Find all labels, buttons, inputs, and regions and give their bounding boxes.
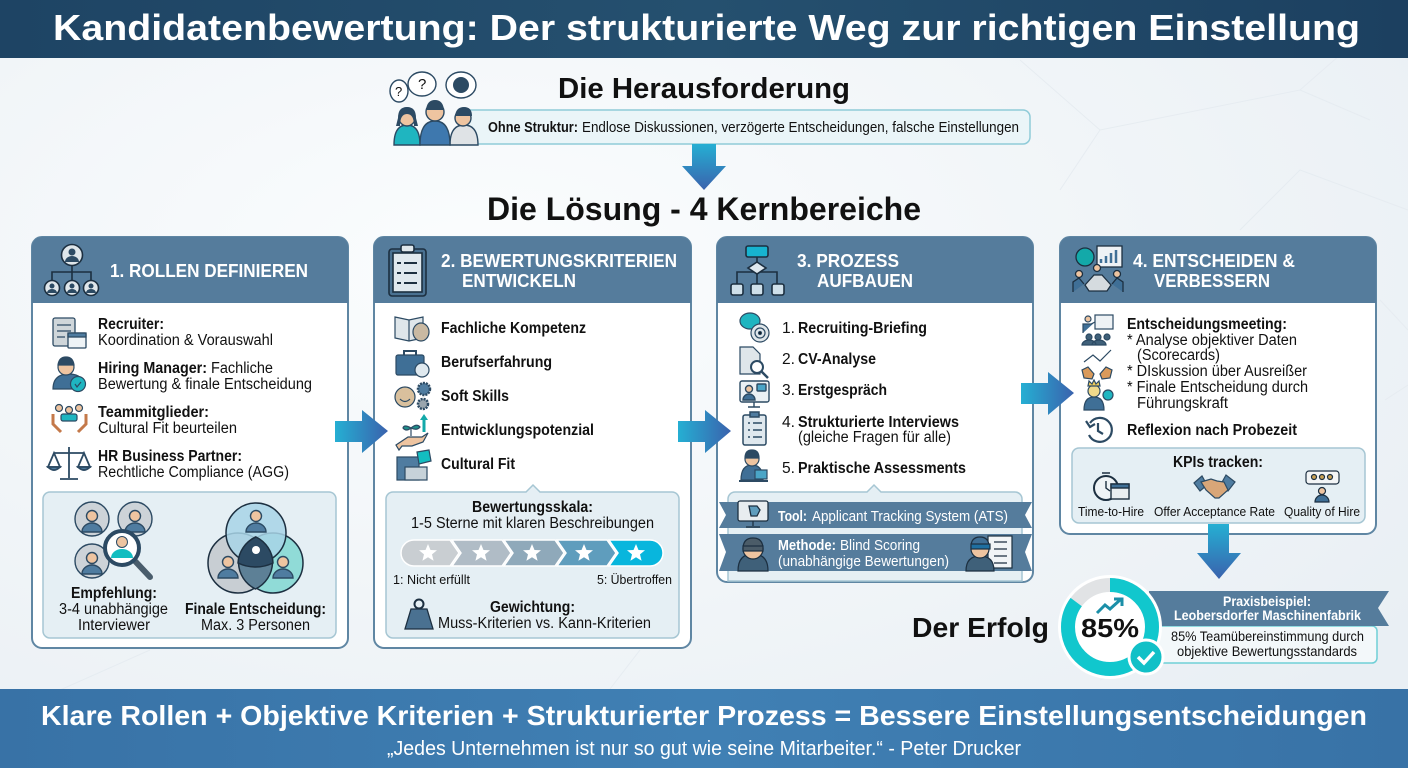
text: HR Business Partner <box>98 448 289 481</box>
footer banner <box>0 689 1408 768</box>
chart: five-star chevron scale <box>401 540 663 566</box>
ribbon: Tool <box>719 501 1032 528</box>
text: Hiring Manager <box>98 360 312 393</box>
icon: briefing target <box>740 313 769 342</box>
scale labels <box>393 572 672 587</box>
heading: Bewertungskriterien <box>441 251 677 291</box>
text: Soft Skills: Soft Skills <box>441 388 509 405</box>
text: Hiring Manager: Bewertung & finale Entscheidung <box>98 376 312 393</box>
text: Entwicklungspotenzial: Entwicklungspotenzial <box>441 422 594 439</box>
text: Empfehlung: 3-4 unabhängige <box>59 601 168 618</box>
text: Finale Entscheidung: Max. 3 Personen <box>201 617 310 634</box>
KPI labels: Offer Acceptance Rate <box>1154 504 1275 519</box>
text: step 5: Praktische Assessments <box>798 460 966 477</box>
text: step 3: Erstgespräch <box>798 382 887 399</box>
heading: Prozess: 3. PROZESS <box>797 251 899 271</box>
text: Empfehlung: Empfehlung: <box>71 585 157 602</box>
callout: Ohne Struktur: Ohne Struktur: <box>488 120 578 136</box>
ribbon: Praxisbeispiel case study: objektive Bewertungsstandards <box>1177 643 1357 659</box>
icon: flowchart <box>731 246 784 295</box>
chart: 85 percent donut <box>1058 575 1163 679</box>
text: Bewertungsskala: 1-5 Sterne mit klaren Beschreibungen <box>411 515 654 532</box>
text: KPIs tracken: KPIs tracken: <box>1173 454 1263 471</box>
text: step 1: Recruiting-Briefing <box>798 320 927 337</box>
text: decision meeting <box>1127 316 1308 412</box>
ribbon: Methode: (unabhängige Bewertungen) <box>778 553 949 570</box>
heading: Der Erfolg: Der Erfolg <box>912 612 1049 643</box>
info box: interviewer and decision <box>43 492 336 638</box>
ribbon: Praxisbeispiel case study: 85% Teamübereinstimmung durch <box>1171 628 1364 644</box>
heading: Prozess: AUFBAUEN <box>817 271 913 291</box>
ribbon: Methode: Methode: <box>778 537 836 554</box>
text: step 3: 3. <box>782 382 795 399</box>
icon: venn diagram <box>208 503 303 593</box>
text: decision meeting: * Analyse objektiver Daten <box>1127 332 1297 349</box>
info box: KPIs <box>1072 448 1365 523</box>
text: Recruiter: Koordination & Vorauswahl <box>98 332 273 349</box>
callout: Ohne Struktur: Endlose Diskussionen, verzögerte Entscheidungen, falsche Einstellungen <box>582 120 1019 136</box>
icon: smile and gears <box>395 383 430 409</box>
text: Recruiter: Recruiter: <box>98 316 164 333</box>
callout: Ohne Struktur <box>462 110 1030 144</box>
icon: leader with medal <box>1084 380 1113 410</box>
icon: blind scoring reviewer <box>966 536 1012 571</box>
icon: assessment at laptop <box>739 450 768 481</box>
heading: Die Herausforderung: Die Herausforderung <box>558 73 850 105</box>
text: Gewichtung: Gewichtung: <box>490 599 575 616</box>
ribbon: Praxisbeispiel case study: Leobersdorfer Maschinenfabrik <box>1174 607 1361 623</box>
icon: hiring manager <box>53 357 86 392</box>
text: Reflexion: Reflexion nach Probezeit <box>1127 422 1297 439</box>
icon: hands and trend line <box>1082 350 1112 379</box>
text: Teammitglieder: Cultural Fit beurteilen <box>98 420 237 437</box>
text: step 2: CV-Analyse <box>798 351 876 368</box>
text: Hiring Manager: Hiring Manager: <box>98 360 207 377</box>
icon: interview checklist <box>743 412 766 445</box>
text: Bewertungsskala: Bewertungsskala: <box>472 499 593 516</box>
heading: Bewertungskriterien: ENTWICKELN <box>462 271 576 291</box>
arrow: panel 4 to success <box>1197 524 1241 579</box>
arrow: panel 1 to 2 <box>335 410 388 453</box>
chart: 85 percent donut: 85% <box>1081 613 1139 643</box>
icon: CV analysis <box>740 347 768 378</box>
text: Empfehlung: Interviewer <box>78 617 150 634</box>
ribbon: Tool: Applicant Tracking System (ATS) <box>812 508 1008 525</box>
text: step 4: Strukturierte Interviews <box>798 414 959 431</box>
text: step 4: 4. <box>782 414 795 431</box>
icon: meeting with charts <box>1073 246 1123 292</box>
text: Finale Entscheidung: Finale Entscheidung: <box>185 601 326 618</box>
icon: scales <box>48 447 90 479</box>
text: Recruiter <box>98 316 273 349</box>
arrow: panel 3 to 4 <box>1021 372 1074 415</box>
footer banner: Klare Rollen + Objektive Kriterien + Strukturierter Prozess = Bessere Einstellungsentscheidungen <box>41 700 1367 731</box>
icon: team in hands <box>53 404 86 432</box>
KPI labels <box>1078 504 1360 519</box>
text: Teammitglieder <box>98 404 237 437</box>
box behind ribbons <box>728 485 1022 581</box>
ribbon: Methode <box>719 534 1032 571</box>
text: Empfehlung <box>59 585 168 634</box>
text: decision meeting: Führungskraft <box>1137 395 1229 412</box>
icon: org chart <box>44 244 98 296</box>
heading: Bewertungskriterien: 2. BEWERTUNGSKRITERIEN <box>441 251 677 271</box>
icon: blindfolded person <box>738 538 768 571</box>
text: Bewertungsskala <box>411 499 654 532</box>
text: step 1: 1. <box>782 320 795 337</box>
icon: confused people <box>390 72 478 145</box>
icon: stopwatch and calendar <box>1094 473 1129 500</box>
heading: Entscheiden: VERBESSERN <box>1154 271 1270 291</box>
text: HR Business Partner: Rechtliche Compliance (AGG) <box>98 464 289 481</box>
icon: clipboard calendar <box>53 318 86 348</box>
icon: confused people: ? <box>418 76 426 93</box>
icon: ATS monitor <box>738 501 768 527</box>
ribbon: Praxisbeispiel case study: Praxisbeispiel: <box>1223 593 1311 609</box>
text: HR Business Partner: HR Business Partner: <box>98 448 242 465</box>
arrow: panel 2 to 3 <box>678 410 731 453</box>
text: Teammitglieder: Teammitglieder: <box>98 404 209 421</box>
heading: Entscheiden: 4. ENTSCHEIDEN & <box>1133 251 1295 271</box>
text: step 5: 5. <box>782 460 795 477</box>
scale labels: 1: Nicht erfüllt <box>393 572 470 587</box>
panel: 1 Rollen definieren <box>32 237 348 648</box>
text: step 4: (gleiche Fragen für alle) <box>798 429 951 446</box>
icon: confused people: ? <box>395 84 402 99</box>
icon: video call <box>740 381 769 407</box>
info box: rating scale <box>386 485 679 638</box>
text: Berufserfahrung: Berufserfahrung <box>441 354 552 371</box>
text: decision meeting: (Scorecards) <box>1137 347 1220 364</box>
icon: weight <box>405 600 433 629</box>
text: Hiring Manager: Fachliche <box>211 360 273 377</box>
heading: Die Lösung: Die Lösung - 4 Kernbereiche <box>487 191 921 227</box>
heading: Rollen: 1. ROLLEN DEFINIEREN <box>110 261 308 281</box>
icon: handshake <box>1194 475 1235 498</box>
text: step 2: 2. <box>782 351 795 368</box>
panel: 4 Entscheiden <box>1060 237 1376 534</box>
text: decision meeting: * DIskussion über Ausreißer <box>1127 363 1307 380</box>
text: Cultural Fit: Cultural Fit <box>441 456 515 473</box>
icon: clipboard <box>389 245 426 296</box>
icon: interviewers with magnifier <box>75 502 152 578</box>
KPI labels: Time-to-Hire <box>1078 504 1144 519</box>
text: Gewichtung <box>438 599 651 632</box>
ribbon: Praxisbeispiel case study <box>1149 591 1389 663</box>
arrow: challenge to solution <box>682 144 726 190</box>
title banner <box>0 0 1408 58</box>
icon: book and brain <box>395 317 429 341</box>
icon: puzzle <box>397 450 431 480</box>
ribbon: Methode: Blind Scoring <box>840 537 920 554</box>
panel: 3 Prozess <box>717 237 1033 582</box>
footer banner: „Jedes Unternehmen ist nur so gut wie seine Mitarbeiter.“ - Peter Drucker <box>387 738 1021 760</box>
text: Gewichtung: Muss-Kriterien vs. Kann-Kriterien <box>438 615 651 632</box>
scale labels: 5: Übertroffen <box>597 572 672 587</box>
icon: reflection clock <box>1086 418 1112 442</box>
heading: Entscheiden <box>1133 251 1295 291</box>
text: decision meeting: Entscheidungsmeeting: <box>1127 316 1287 333</box>
text: step 4 <box>782 414 959 446</box>
text: Fachliche Kompetenz: Fachliche Kompetenz <box>441 320 586 337</box>
ribbon: Tool: Tool: <box>778 508 807 525</box>
text: Finale Entscheidung <box>185 601 326 634</box>
text: decision meeting: * Finale Entscheidung durch <box>1127 379 1308 396</box>
KPI labels: Quality of Hire <box>1284 504 1360 519</box>
icon: presenter <box>1082 315 1113 345</box>
title banner: Kandidatenbewertung: Der strukturierte Weg zur richtigen Einstellung <box>53 7 1360 48</box>
heading: Prozess <box>797 251 913 291</box>
icon: rating person <box>1306 471 1339 502</box>
icon: briefcase <box>396 351 429 377</box>
panel: 2 Bewertungskriterien <box>374 237 691 648</box>
icon: growing plant in hand <box>396 414 428 450</box>
